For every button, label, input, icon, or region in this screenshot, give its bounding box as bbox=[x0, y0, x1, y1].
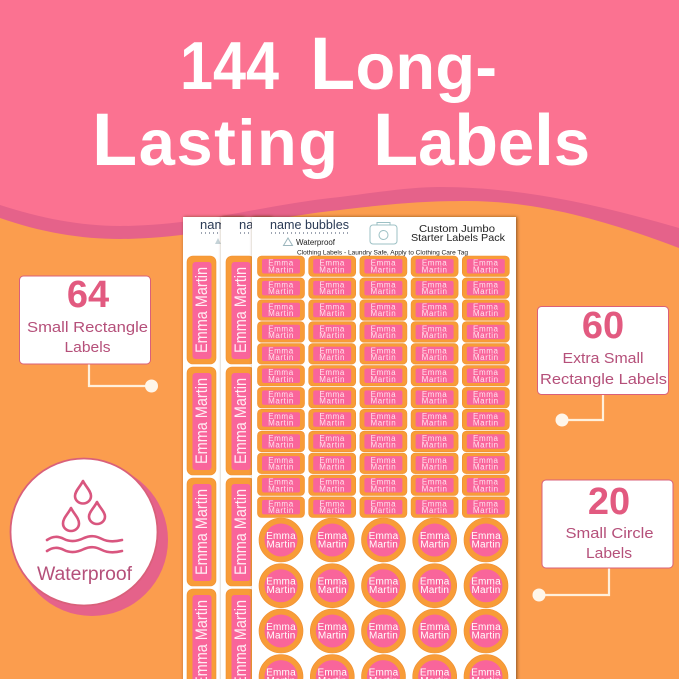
small rectangle labels grid: Martin bbox=[319, 287, 345, 296]
small rectangle labels grid: Martin bbox=[268, 309, 294, 318]
icon: small droplet triangle bbox=[284, 238, 292, 246]
callout: 60 extra small rectangle labels bbox=[538, 305, 668, 426]
callout: 20 small circle labels: 20 bbox=[588, 481, 630, 523]
circle labels grid: Martin bbox=[369, 630, 398, 642]
icon: lunchbox bbox=[370, 222, 397, 244]
small rectangle labels grid: Martin bbox=[422, 397, 448, 406]
circle labels grid: Emma bbox=[317, 622, 347, 633]
small rectangle labels grid: Emma bbox=[319, 456, 345, 465]
small rectangle labels grid: Martin bbox=[473, 462, 499, 471]
callout: 64 small rectangle labels bbox=[20, 274, 158, 392]
small rectangle labels grid: Emma bbox=[268, 456, 294, 465]
small rectangle labels grid: Emma bbox=[473, 500, 499, 509]
title bbox=[92, 22, 590, 181]
small rectangle labels grid: Martin bbox=[370, 353, 396, 362]
small rectangle labels grid: Martin bbox=[319, 265, 345, 274]
small rectangle labels grid: Martin bbox=[422, 375, 448, 384]
small rectangle labels grid: Martin bbox=[319, 375, 345, 384]
small rectangle labels grid: Emma bbox=[268, 390, 294, 399]
callout: 64 small rectangle labels: Labels bbox=[64, 339, 110, 356]
back sheet 1 with tall labels: name bbox=[200, 217, 233, 232]
small rectangle labels grid: Martin bbox=[319, 353, 345, 362]
small rectangle labels grid: Martin bbox=[473, 331, 499, 340]
small rectangle labels grid: Martin bbox=[422, 462, 448, 471]
small rectangle labels grid: Emma bbox=[473, 412, 499, 421]
small rectangle labels grid: Martin bbox=[268, 484, 294, 493]
small rectangle labels grid: Emma bbox=[422, 302, 447, 311]
small rectangle labels grid: Martin bbox=[473, 506, 499, 515]
circle labels grid: Emma bbox=[369, 668, 399, 679]
small rectangle labels grid: Emma bbox=[473, 324, 499, 333]
small rectangle labels grid: Emma bbox=[473, 281, 499, 290]
small rectangle labels grid: Emma bbox=[422, 412, 447, 421]
callout: 64 small rectangle labels: 64 bbox=[67, 274, 109, 316]
circle labels grid: Emma bbox=[369, 622, 399, 633]
circle labels grid: Emma bbox=[471, 577, 501, 588]
circle labels grid: Emma bbox=[420, 577, 450, 588]
callout: 60 extra small rectangle labels: 60 bbox=[582, 305, 624, 347]
sheet title bbox=[411, 223, 506, 244]
small rectangle labels grid: Emma bbox=[319, 368, 345, 377]
small rectangle labels grid: Emma bbox=[422, 390, 447, 399]
small rectangle labels grid: Emma bbox=[371, 346, 396, 355]
small rectangle labels grid: Emma bbox=[422, 434, 447, 443]
small rectangle labels grid: Emma bbox=[371, 302, 396, 311]
small rectangle labels grid: Martin bbox=[370, 331, 396, 340]
small rectangle labels grid: Martin bbox=[422, 265, 448, 274]
wave: light pink header bbox=[0, 0, 679, 228]
small rectangle labels grid: Emma bbox=[371, 390, 396, 399]
back sheet 2 with tall labels: name bbox=[239, 217, 272, 232]
small rectangle labels grid: Emma bbox=[268, 346, 294, 355]
circle labels grid: Emma bbox=[369, 577, 399, 588]
small rectangle labels grid: Martin bbox=[370, 309, 396, 318]
small rectangle labels grid: Emma bbox=[422, 259, 447, 268]
sheet title: Starter Labels Pack bbox=[411, 232, 506, 244]
small rectangle labels grid: Martin bbox=[370, 287, 396, 296]
sheet brand: name bubbles bbox=[270, 217, 349, 232]
icon: water drops and waves bbox=[47, 481, 122, 552]
small rectangle labels grid: Emma bbox=[422, 478, 447, 487]
circle labels grid: Emma bbox=[369, 531, 399, 542]
badge shadow bbox=[16, 464, 168, 616]
small rectangle labels grid: Emma bbox=[319, 281, 345, 290]
small rectangle labels grid: Martin bbox=[422, 309, 448, 318]
small rectangle labels grid: Martin bbox=[268, 353, 294, 362]
callout: 20 small circle labels bbox=[532, 480, 673, 602]
circle labels grid: Emma bbox=[471, 668, 501, 679]
small rectangle labels grid: Martin bbox=[370, 441, 396, 450]
small rectangle labels grid: Emma bbox=[319, 434, 345, 443]
small rectangle labels grid: Emma bbox=[422, 456, 447, 465]
small rectangle labels grid: Martin bbox=[319, 309, 345, 318]
small rectangle labels grid: Emma bbox=[319, 346, 345, 355]
small rectangle labels grid: Emma bbox=[268, 302, 294, 311]
badge: waterproof bbox=[10, 458, 168, 616]
small rectangle labels grid: Emma bbox=[473, 368, 499, 377]
callout: 60 extra small rectangle labels: Extra Small bbox=[562, 350, 644, 367]
circle labels grid: Martin bbox=[369, 540, 398, 550]
circle labels grid: Emma bbox=[317, 577, 347, 588]
small rectangle labels grid: Emma bbox=[473, 390, 499, 399]
small rectangle labels grid: Martin bbox=[268, 331, 294, 340]
circle labels grid: Emma bbox=[317, 668, 347, 679]
small rectangle labels grid: Martin bbox=[422, 419, 448, 428]
small rectangle labels grid: Martin bbox=[422, 484, 448, 493]
circle labels grid: Martin bbox=[472, 630, 500, 642]
circle labels grid bbox=[259, 518, 508, 679]
small rectangle labels grid: Emma bbox=[371, 412, 396, 421]
small rectangle labels grid: Martin bbox=[319, 441, 345, 450]
small rectangle labels grid: Martin bbox=[268, 287, 294, 296]
small rectangle labels grid: Emma bbox=[371, 324, 396, 333]
sheet paper bbox=[252, 217, 516, 679]
small rectangle labels grid: Martin bbox=[422, 353, 448, 362]
callout: 20 small circle labels: Small Circle bbox=[566, 525, 654, 542]
small rectangle labels grid: Emma bbox=[371, 434, 396, 443]
back sheet 1 with tall labels: Emma Martin bbox=[192, 267, 211, 353]
small rectangle labels grid: Emma bbox=[371, 259, 396, 268]
small rectangle labels grid: Emma bbox=[268, 500, 294, 509]
small rectangle labels grid: Emma bbox=[319, 324, 345, 333]
wave band: dark pink bbox=[0, 0, 679, 248]
small rectangle labels grid: Emma bbox=[268, 281, 294, 290]
small rectangle labels grid: Martin bbox=[370, 462, 396, 471]
small rectangle labels grid: Martin bbox=[268, 375, 294, 384]
circle labels grid: Emma bbox=[471, 531, 501, 542]
small rectangle labels grid: Martin bbox=[422, 506, 448, 515]
small rectangle labels grid: Emma bbox=[319, 302, 345, 311]
small rectangle labels grid: Emma bbox=[268, 478, 294, 487]
circle labels grid: Emma bbox=[266, 668, 296, 679]
front label sheet bbox=[252, 217, 516, 679]
small rectangle labels grid: Martin bbox=[473, 419, 499, 428]
small rectangle labels grid: Emma bbox=[422, 324, 447, 333]
small rectangle labels grid: Martin bbox=[319, 484, 345, 493]
small rectangle labels grid: Martin bbox=[422, 287, 448, 296]
small rectangle labels grid: Emma bbox=[268, 324, 294, 333]
small rectangle labels grid: Martin bbox=[473, 353, 499, 362]
circle labels grid: Emma bbox=[420, 668, 450, 679]
small rectangle labels grid: Martin bbox=[473, 397, 499, 406]
small rectangle labels grid: Martin bbox=[473, 441, 499, 450]
small rectangle labels grid: Emma bbox=[473, 259, 499, 268]
small rectangle labels grid: Martin bbox=[319, 506, 345, 515]
circle labels grid: Martin bbox=[267, 540, 295, 550]
small rectangle labels grid: Emma bbox=[268, 412, 294, 421]
small rectangle labels grid: Martin bbox=[268, 441, 294, 450]
circle labels grid: Emma bbox=[317, 531, 347, 542]
small rectangle labels grid: Emma bbox=[268, 368, 294, 377]
small rectangle labels grid: Martin bbox=[268, 506, 294, 515]
small rectangle labels grid: Emma bbox=[473, 456, 499, 465]
small rectangle labels grid: Emma bbox=[319, 478, 345, 487]
callout: 64 small rectangle labels: Small Rectangle bbox=[27, 319, 148, 336]
small rectangle labels grid: Emma bbox=[473, 478, 499, 487]
small rectangle labels grid: Emma bbox=[473, 346, 499, 355]
small rectangle labels grid: Martin bbox=[370, 397, 396, 406]
small rectangle labels grid: Emma bbox=[319, 259, 345, 268]
small rectangle labels grid: Emma bbox=[319, 390, 345, 399]
small rectangle labels grid: Emma bbox=[371, 500, 396, 509]
back sheet 2 with tall labels: Emma Martin bbox=[231, 267, 250, 353]
small rectangle labels grid: Emma bbox=[371, 478, 396, 487]
circle labels grid: Emma bbox=[266, 622, 296, 633]
circle labels grid: Martin bbox=[267, 630, 295, 642]
circle labels grid: Martin bbox=[318, 630, 347, 642]
circle labels grid: Emma bbox=[420, 622, 450, 633]
sheet waterproof note: Waterproof bbox=[296, 238, 336, 247]
small rectangle labels grid: Emma bbox=[268, 259, 294, 268]
small rectangle labels grid: Martin bbox=[370, 375, 396, 384]
circle labels grid: Martin bbox=[420, 585, 449, 596]
small rectangle labels grid: Emma bbox=[473, 434, 499, 443]
small rectangle labels grid: Martin bbox=[473, 287, 499, 296]
small rectangle labels grid: Martin bbox=[268, 397, 294, 406]
small rectangle labels grid: Emma bbox=[371, 456, 396, 465]
circle labels grid: Martin bbox=[369, 585, 398, 596]
small rectangle labels grid: Martin bbox=[319, 397, 345, 406]
small rectangle labels grid: Emma bbox=[422, 368, 447, 377]
small rectangle labels grid: Martin bbox=[370, 419, 396, 428]
small rectangle labels grid: Martin bbox=[268, 265, 294, 274]
title: Long- bbox=[310, 22, 497, 105]
title: Lasting bbox=[92, 98, 338, 181]
circle labels grid: Emma bbox=[471, 622, 501, 633]
badge disc bbox=[10, 458, 158, 606]
small rectangle labels grid: Martin bbox=[473, 375, 499, 384]
small rectangle labels grid: Martin bbox=[319, 331, 345, 340]
sheet title: Custom Jumbo bbox=[419, 223, 495, 235]
circle labels grid: Martin bbox=[318, 540, 347, 550]
small rectangle labels grid: Martin bbox=[473, 265, 499, 274]
circle labels grid: Martin bbox=[318, 585, 347, 596]
badge caption: Waterproof bbox=[37, 564, 133, 585]
back sheet 2 with tall labels: Emma Martin bbox=[231, 378, 250, 464]
circle labels grid: Emma bbox=[420, 531, 450, 542]
circle labels grid: Martin bbox=[472, 585, 500, 596]
small rectangle labels grid: Martin bbox=[370, 484, 396, 493]
small rectangle labels grid: Emma bbox=[422, 281, 447, 290]
small rectangle labels grid: Emma bbox=[422, 500, 447, 509]
small rectangle labels grid: Martin bbox=[268, 419, 294, 428]
sheet subtitle: Clothing Labels - Laundry Safe, Apply to Clothing Care Tag bbox=[297, 250, 468, 256]
small rectangle labels grid: Martin bbox=[370, 265, 396, 274]
back sheet 2 with tall labels bbox=[221, 217, 272, 679]
small rectangle labels grid: Emma bbox=[319, 500, 345, 509]
small rectangle labels grid: Martin bbox=[319, 419, 345, 428]
small rectangle labels grid: Emma bbox=[268, 434, 294, 443]
small rectangle labels grid: Emma bbox=[422, 346, 447, 355]
small rectangle labels grid: Martin bbox=[422, 331, 448, 340]
circle labels grid: Martin bbox=[420, 540, 449, 550]
small rectangle labels grid: Emma bbox=[371, 368, 396, 377]
callout: 60 extra small rectangle labels: Rectangle Labels bbox=[540, 371, 667, 388]
title: Labels bbox=[373, 98, 590, 181]
small rectangle labels grid: Martin bbox=[268, 462, 294, 471]
small rectangle labels grid: Martin bbox=[422, 441, 448, 450]
circle labels grid: Emma bbox=[266, 531, 296, 542]
circle labels grid: Martin bbox=[472, 540, 500, 550]
small rectangle labels grid: Martin bbox=[473, 484, 499, 493]
small rectangle labels grid: Emma bbox=[473, 302, 499, 311]
small rectangle labels grid bbox=[258, 256, 509, 517]
back sheet 2 with tall labels: Emma Martin bbox=[231, 489, 250, 575]
circle labels grid: Martin bbox=[267, 585, 295, 596]
circle labels grid: Martin bbox=[420, 630, 449, 642]
small rectangle labels grid: Martin bbox=[370, 506, 396, 515]
small rectangle labels grid: Emma bbox=[371, 281, 396, 290]
back sheet 1 with tall labels bbox=[183, 217, 243, 679]
small rectangle labels grid: Martin bbox=[319, 462, 345, 471]
back sheet 1 with tall labels: Emma Martin bbox=[192, 489, 211, 575]
small rectangle labels grid: Martin bbox=[473, 309, 499, 318]
back sheet 1 with tall labels: Emma Martin bbox=[192, 378, 211, 464]
circle labels grid: Emma bbox=[266, 577, 296, 588]
callout: 20 small circle labels: Labels bbox=[586, 545, 632, 562]
title: 144 bbox=[180, 28, 279, 104]
small rectangle labels grid: Emma bbox=[319, 412, 345, 421]
